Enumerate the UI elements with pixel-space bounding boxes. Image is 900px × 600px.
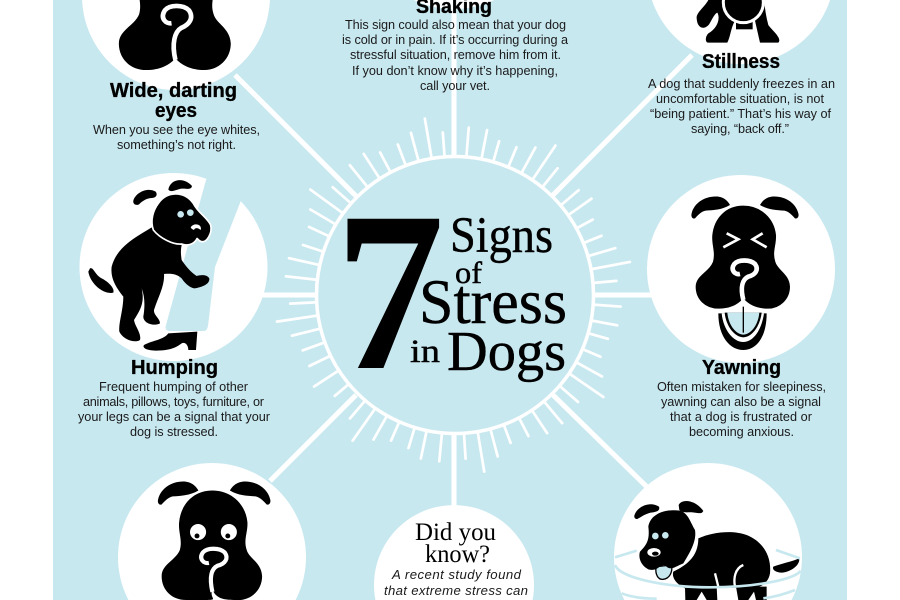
sunburst rays around title bbox=[277, 119, 630, 472]
description: yawning can also be a signal bbox=[661, 395, 821, 409]
icon: dog and shoe bbox=[88, 180, 211, 351]
heading: Humping bbox=[131, 356, 218, 379]
heading line 2: eyes bbox=[155, 99, 197, 122]
description bbox=[93, 123, 260, 152]
sign: shaking bbox=[342, 0, 569, 93]
description: This sign could also mean that your dog bbox=[345, 18, 566, 32]
sign: dog with worried eyes bbox=[118, 463, 306, 600]
heading: Stillness bbox=[702, 50, 780, 73]
sign: stillness bbox=[647, 0, 835, 136]
icon: frozen dog bbox=[697, 0, 779, 43]
description bbox=[648, 77, 835, 136]
title: 7 Signs of Stress in Dogs: Stress bbox=[419, 267, 567, 337]
title: 7 Signs of Stress in Dogs: Signs bbox=[450, 208, 553, 264]
spokes connecting title to signs bbox=[235, 0, 692, 510]
leg silhouette cut-out bbox=[166, 165, 252, 331]
sign: yawning bbox=[647, 175, 835, 439]
sign: humping bbox=[78, 165, 271, 439]
description: Frequent humping of other bbox=[99, 380, 249, 394]
title: 7 Signs of Stress in Dogs: in bbox=[410, 334, 440, 370]
description bbox=[657, 380, 826, 439]
title: 7 Signs of Stress in Dogs: Dogs bbox=[447, 321, 566, 383]
sign: dog shaking bbox=[614, 463, 802, 600]
description: A dog that suddenly freezes in an bbox=[648, 77, 835, 91]
description: “being patient.” That’s his way of bbox=[650, 107, 831, 121]
callout heading: Did you bbox=[415, 519, 496, 546]
icon: yawning dog bbox=[691, 197, 799, 350]
description: that a dog is frustrated or bbox=[670, 410, 813, 424]
description: becoming anxious. bbox=[689, 425, 794, 439]
title: 7 Signs of Stress in Dogs bbox=[335, 166, 567, 418]
icon: worried dog bbox=[158, 482, 270, 600]
description: Often mistaken for sleepiness, bbox=[657, 380, 826, 394]
description: animals, pillows, toys, furniture, or bbox=[83, 395, 265, 409]
icon: side-view dog bbox=[615, 501, 801, 600]
sign: wide, darting eyes bbox=[82, 0, 270, 152]
callout heading: know? bbox=[425, 541, 490, 568]
description: saying, “back off.” bbox=[691, 122, 789, 136]
description bbox=[342, 18, 569, 93]
description: stressful situation, remove him from it. bbox=[350, 48, 561, 62]
title: 7 Signs of Stress in Dogs: 7 bbox=[335, 166, 444, 418]
description: something’s not right. bbox=[117, 138, 236, 152]
description: call your vet. bbox=[420, 79, 490, 93]
callout text bbox=[384, 567, 528, 598]
description bbox=[78, 380, 271, 439]
description: When you see the eye whites, bbox=[93, 123, 260, 137]
central title circle bbox=[316, 156, 594, 434]
heading: Yawning bbox=[702, 356, 781, 379]
description: uncomfortable situation, is not bbox=[656, 92, 824, 106]
icon: wide-eyed dog bbox=[119, 0, 231, 70]
description: dog is stressed. bbox=[130, 425, 218, 439]
description: is cold or in pain. If it’s occurring during a bbox=[342, 33, 569, 47]
heading: Wide, darting bbox=[110, 79, 237, 102]
description: If you don’t know why it’s happening, bbox=[352, 64, 558, 78]
callout text: A recent study found bbox=[391, 567, 522, 582]
callout heading bbox=[415, 519, 496, 568]
description: your legs can be a signal that your bbox=[78, 410, 271, 424]
title: 7 Signs of Stress in Dogs: of bbox=[455, 255, 483, 290]
callout: did you know bbox=[374, 505, 534, 600]
callout text: that extreme stress can bbox=[384, 583, 528, 598]
